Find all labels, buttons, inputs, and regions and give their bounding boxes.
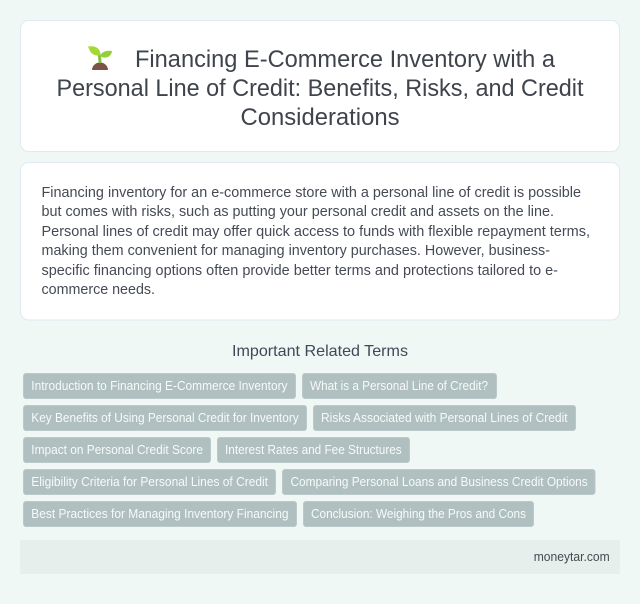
title: Financing E-Commerce Inventory with a <box>135 46 556 73</box>
chip: eligibility: Eligibility Criteria for Personal Lines of Credit <box>31 475 268 489</box>
chip: interest rates <box>218 438 410 462</box>
footer source text: moneytar.com <box>534 550 610 564</box>
chip: best practices: Best Practices for Managing Inventory Financing <box>31 507 289 521</box>
chip: what is a personal line of credit <box>302 374 496 398</box>
chip: risks <box>314 406 576 430</box>
chip: comparing <box>282 470 595 494</box>
chip: impact on credit score: Impact on Personal Credit Score <box>31 443 203 457</box>
text block: summary paragraph <box>42 185 590 298</box>
text block: summary paragraph: commerce needs. <box>42 282 155 298</box>
heading: important related terms: Important Related Terms <box>232 343 408 360</box>
panel: related term chips <box>24 374 595 526</box>
chip: best practices <box>24 502 296 526</box>
title: Personal Line of Credit: Benefits, Risks, and Credit <box>56 75 584 102</box>
chip: introduction: Introduction to Financing E-Commerce Inventory <box>31 379 288 393</box>
chip: key benefits: Key Benefits of Using Personal Credit for Inventory <box>31 411 299 425</box>
footer bar <box>20 540 620 574</box>
title <box>56 46 584 131</box>
chip: introduction <box>24 374 296 398</box>
panel: summary card <box>20 162 620 320</box>
panel: title card <box>20 20 620 152</box>
chip: conclusion: Conclusion: Weighing the Pros and Cons <box>311 507 526 521</box>
text block: summary paragraph: Personal lines of credit may offer quick access to funds with flexible repayment terms, <box>42 224 590 240</box>
icon: seedling <box>88 46 112 70</box>
chip: risks: Risks Associated with Personal Lines of Credit <box>321 411 568 425</box>
chip: what is a personal line of credit: What is a Personal Line of Credit? <box>310 379 488 393</box>
chip: interest rates: Interest Rates and Fee Structures <box>225 443 402 457</box>
chip: key benefits <box>24 406 306 430</box>
chip: conclusion <box>304 502 534 526</box>
chip: comparing: Comparing Personal Loans and Business Credit Options <box>290 475 588 489</box>
text block: summary paragraph: but comes with risks, such as putting your personal credit and assets on the line. <box>42 204 554 220</box>
text block: summary paragraph: specific financing options often provide better terms and protections tailored to e- <box>42 263 558 279</box>
title: Considerations <box>240 104 400 131</box>
chip: eligibility <box>24 470 276 494</box>
text block: summary paragraph: making them convenient for managing inventory purchases. However, business- <box>42 243 550 259</box>
text block: summary paragraph: Financing inventory for an e-commerce store with a personal line of credit is possible <box>42 185 581 201</box>
chip: impact on credit score <box>24 438 210 462</box>
